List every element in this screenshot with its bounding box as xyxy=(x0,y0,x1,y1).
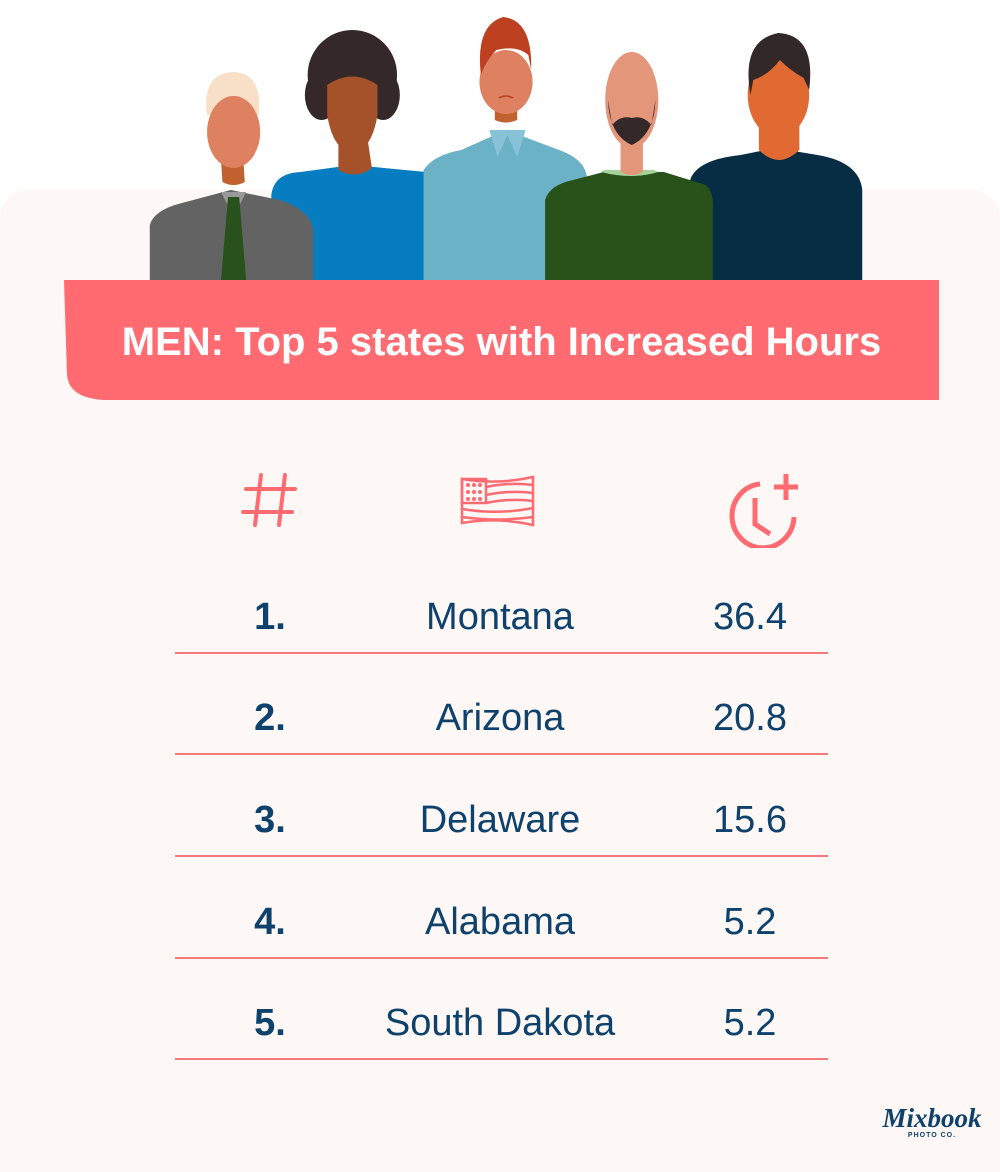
text: 5. xyxy=(254,1002,286,1044)
text: 2. xyxy=(254,697,286,739)
illustration: five men xyxy=(150,17,862,280)
title banner xyxy=(64,280,939,400)
icon: flag xyxy=(460,475,534,527)
text: Arizona xyxy=(436,697,564,739)
text: 36.4 xyxy=(713,596,787,638)
person 3 light blue xyxy=(424,17,587,280)
person 5 navy xyxy=(689,33,862,280)
text: 3. xyxy=(254,799,286,841)
text: 1. xyxy=(254,596,286,638)
icon: clock plus xyxy=(730,474,798,548)
text: Alabama xyxy=(425,901,575,943)
logo: Mixbook xyxy=(882,1103,982,1133)
text: 5.2 xyxy=(724,1002,776,1044)
text: Delaware xyxy=(420,799,580,841)
person 4 green xyxy=(545,52,713,280)
text: 5.2 xyxy=(724,901,776,943)
text: 4. xyxy=(254,901,286,943)
text: Montana xyxy=(426,596,574,638)
logo: PHOTO CO. xyxy=(908,1132,956,1139)
text: South Dakota xyxy=(385,1002,615,1044)
icon: hash xyxy=(241,473,297,527)
person 2 blue xyxy=(271,30,433,280)
title banner: MEN: Top 5 states with Increased Hours xyxy=(122,320,881,364)
text: 15.6 xyxy=(713,799,787,841)
table rows xyxy=(175,596,828,1060)
person 1 gray xyxy=(150,72,313,280)
text: 20.8 xyxy=(713,697,787,739)
